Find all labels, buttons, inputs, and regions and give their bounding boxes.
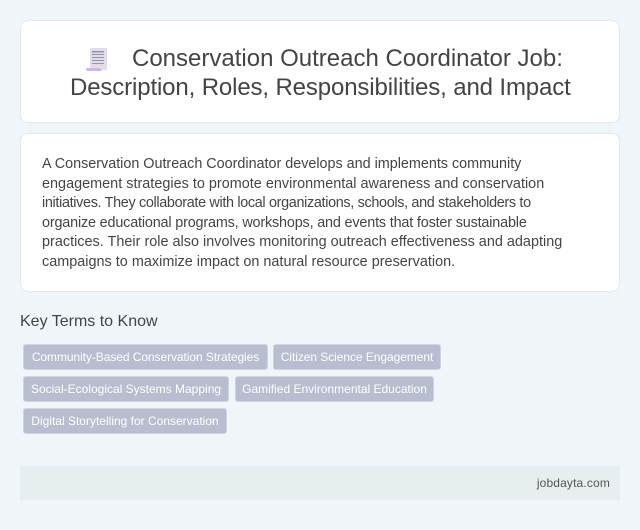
tag bbox=[273, 344, 441, 370]
heading: key terms: Key Terms to Know bbox=[20, 313, 158, 330]
tags group bbox=[23, 344, 441, 434]
title: Description, Roles, Responsibilities, and Impact bbox=[70, 74, 571, 101]
tag bbox=[23, 344, 268, 370]
tag bbox=[23, 408, 227, 434]
footer bar bbox=[20, 466, 620, 500]
description text: campaigns to maximize impact on natural resource preservation. bbox=[42, 254, 455, 270]
description text: A Conservation Outreach Coordinator develops and implements community bbox=[42, 156, 521, 172]
panel: description bbox=[20, 133, 620, 292]
tag bbox=[235, 376, 434, 402]
tag: Citizen Science Engagement bbox=[281, 350, 433, 364]
title bbox=[70, 44, 571, 101]
tag: Digital Storytelling for Conservation bbox=[31, 414, 219, 428]
description text: organize educational programs, workshops, and events that foster sustainable bbox=[42, 214, 527, 230]
panel: title card bbox=[20, 20, 620, 123]
description text: practices. Their role also involves monitoring outreach effectiveness and adapting bbox=[42, 234, 562, 250]
description text: initiatives. They collaborate with local organizations, schools, and stakeholders to bbox=[42, 195, 531, 211]
tag: Social-Ecological Systems Mapping bbox=[31, 382, 221, 396]
description text: engagement strategies to promote environmental awareness and conservation bbox=[42, 176, 544, 192]
footer source: jobdayta.com bbox=[537, 476, 610, 490]
tag: Community-Based Conservation Strategies bbox=[32, 350, 259, 364]
tag: Gamified Environmental Education bbox=[242, 382, 427, 396]
icon: document scroll bbox=[86, 48, 107, 71]
title: Conservation Outreach Coordinator Job: bbox=[132, 44, 563, 72]
tag bbox=[23, 376, 229, 402]
description text bbox=[42, 156, 562, 270]
